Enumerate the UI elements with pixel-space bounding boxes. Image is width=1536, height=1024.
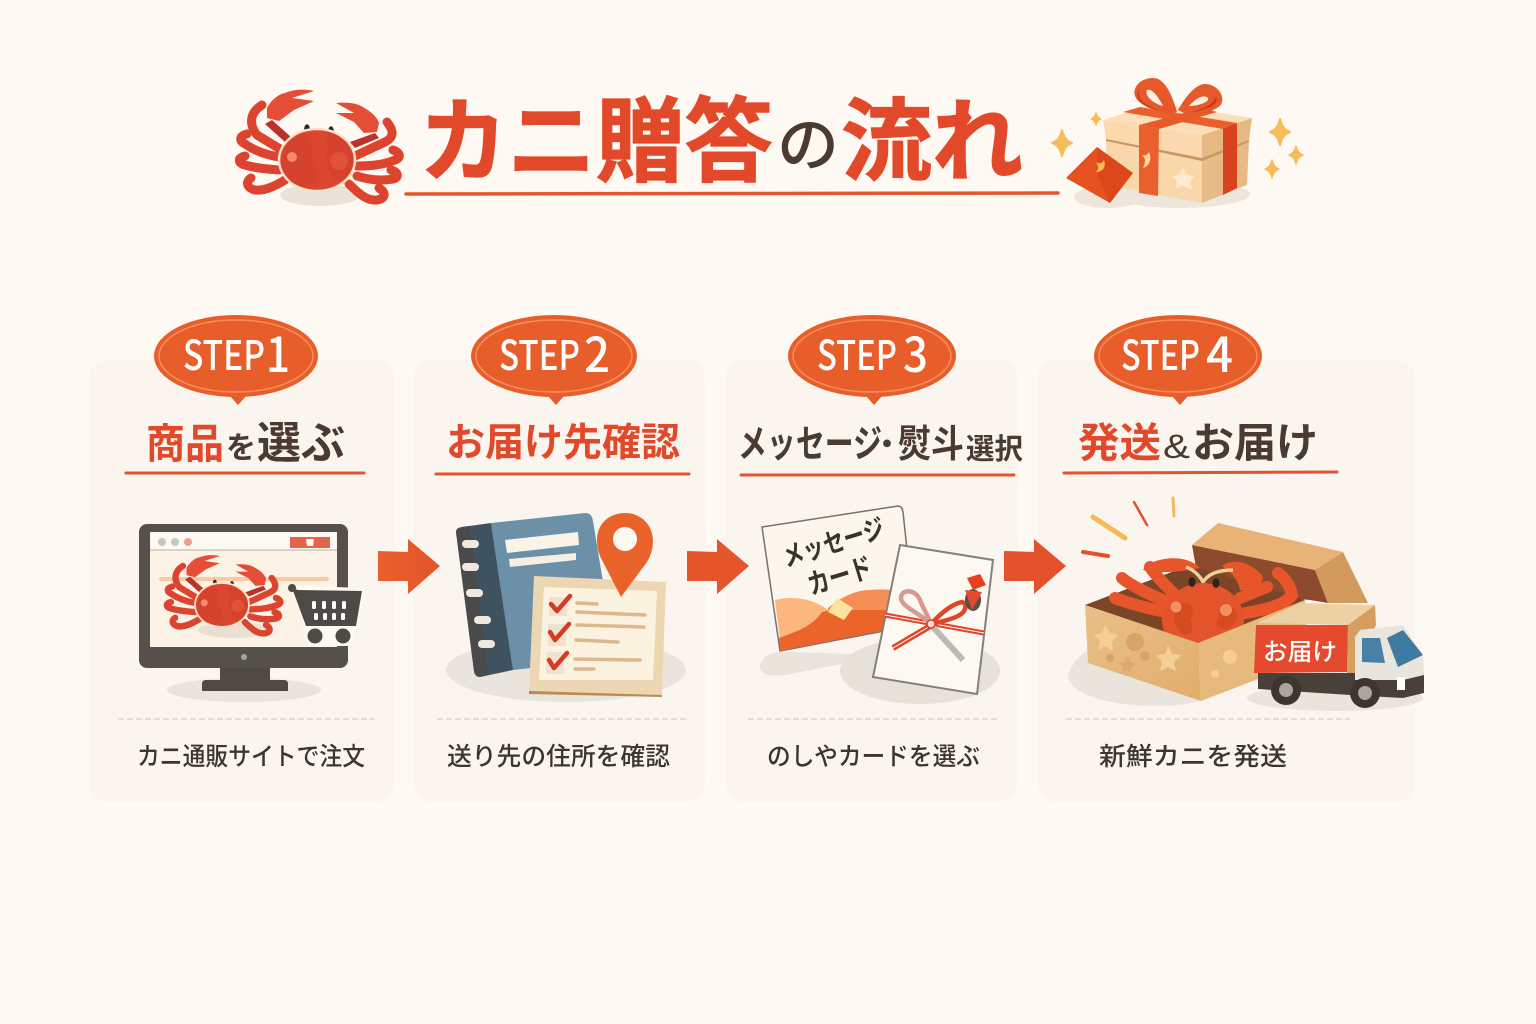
arrow: step 3 to 4 (1004, 539, 1066, 594)
badge: STEP 2: 2 (584, 316, 610, 386)
title text: の (777, 112, 839, 179)
badge: STEP 2 (471, 315, 637, 405)
title text (419, 92, 1023, 194)
panel: step 2 (413, 315, 705, 802)
caption: 送り先の住所を確認 (447, 743, 670, 771)
heading: 商品を選ぶ: 商品 (146, 421, 224, 467)
heading: メッセージ・熨斗選択: ・ (872, 429, 902, 462)
icon: monitor with crab and cart (139, 524, 366, 702)
panel: step 3 (725, 315, 1023, 802)
title text: カニ贈答 (419, 92, 773, 194)
icon: crab in box and delivery truck (1068, 498, 1424, 711)
badge: STEP 1 (154, 315, 318, 405)
heading: 商品を選ぶ (146, 419, 345, 468)
badge: STEP 4: 4 (1206, 316, 1233, 386)
heading: 商品を選ぶ: を (226, 432, 256, 465)
divider (1066, 718, 1350, 720)
badge: STEP 1: STEP (183, 322, 265, 382)
heading: メッセージ・熨斗選択: 選択 (966, 433, 1023, 466)
card background (725, 359, 1018, 802)
badge: STEP 3: STEP (817, 322, 897, 382)
heading: メッセージ・熨斗選択: 熨斗 (898, 424, 964, 466)
card background (413, 359, 705, 802)
heading underline (1064, 472, 1337, 473)
icon: message card and noshi envelope (760, 506, 1000, 704)
title text: 流れ (841, 93, 1023, 193)
icon: message card and noshi envelope: カード (804, 552, 876, 601)
divider (437, 718, 688, 720)
heading underline (126, 472, 364, 474)
panel: step 4 (1037, 315, 1424, 802)
divider (118, 718, 374, 720)
caption: のしやカードを選ぶ (767, 743, 980, 771)
arrow: step 2 to 3 (687, 539, 749, 594)
badge: STEP 4 (1094, 315, 1262, 405)
caption: カニ通販サイトで注文 (137, 743, 365, 771)
heading: 発送&お届け: お届け (1192, 420, 1318, 466)
badge: STEP 1: 1 (266, 316, 290, 386)
icon: address book, pin and checklist (446, 513, 686, 702)
card background (1037, 359, 1415, 802)
icon: crab (239, 90, 399, 206)
heading: 発送&お届け: 発送 (1078, 420, 1161, 466)
card background (89, 359, 395, 802)
heading: メッセージ・熨斗選択 (738, 424, 1023, 466)
heading: メッセージ・熨斗選択: メッセージ (738, 424, 882, 466)
heading: お届け先確認: お届け先確認 (446, 422, 680, 465)
title underline (406, 193, 1058, 194)
panel: step 1 (89, 315, 395, 802)
badge: STEP 3: 3 (903, 316, 928, 386)
caption: 新鮮カニを発送 (1099, 743, 1287, 771)
arrow: step 1 to 2 (378, 539, 440, 594)
badge: STEP 3 (788, 315, 956, 405)
divider (748, 718, 998, 720)
icon: gift box with envelope (1052, 78, 1303, 208)
heading: 発送&お届け: & (1163, 428, 1190, 466)
badge: STEP 4: STEP (1121, 322, 1200, 382)
heading underline (436, 472, 689, 476)
badge: STEP 2: STEP (499, 322, 580, 382)
heading underline (741, 474, 1014, 476)
heading: 発送&お届け (1078, 420, 1318, 466)
heading: 商品を選ぶ: 選ぶ (257, 419, 345, 468)
icon: message card and noshi envelope: メッセージ (779, 513, 888, 573)
title block (239, 78, 1303, 208)
icon: crab in box and delivery truck: お届け (1263, 639, 1337, 666)
